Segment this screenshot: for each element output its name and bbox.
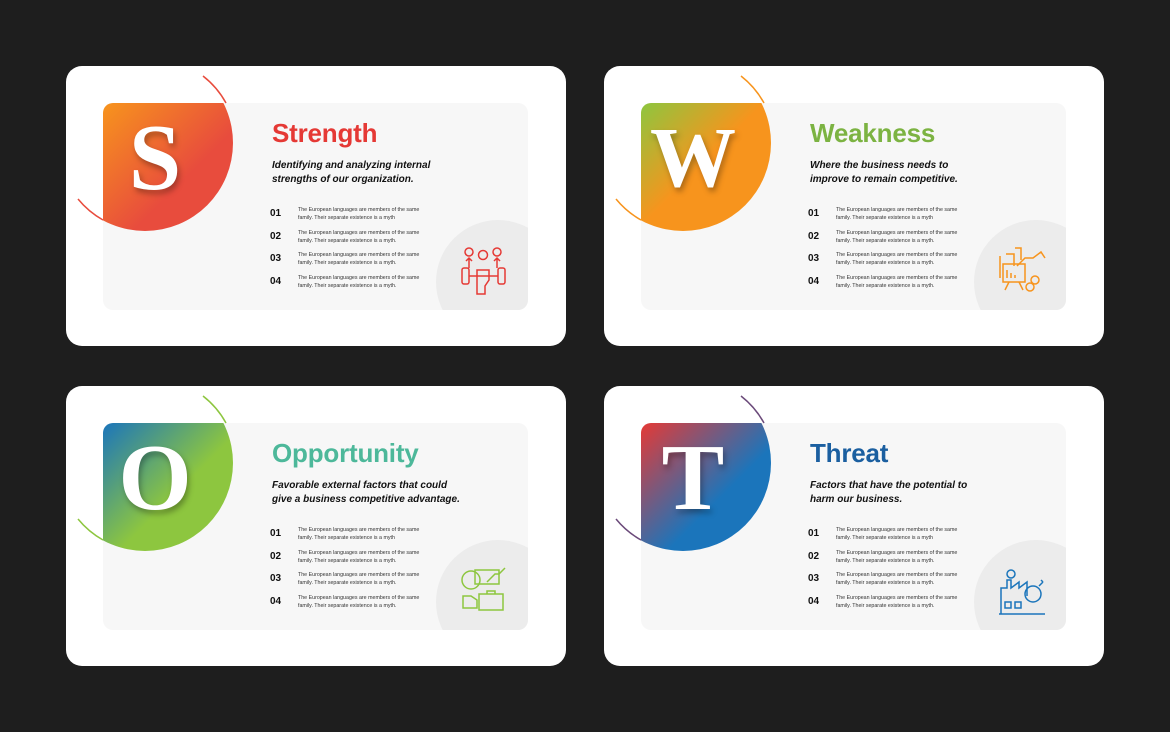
list: 01 bbox=[808, 208, 819, 219]
list: family. Their separate existence is a myth. bbox=[298, 558, 396, 564]
list: The European languages are members of the same bbox=[298, 550, 419, 556]
list: 01 bbox=[270, 528, 281, 539]
list bbox=[808, 527, 958, 609]
list: 02 bbox=[270, 231, 281, 242]
letter shape S: S bbox=[129, 106, 181, 210]
list: family. Their separate existence is a myth. bbox=[836, 558, 934, 564]
letter shape O bbox=[78, 395, 233, 551]
list: The European languages are members of the same bbox=[298, 595, 419, 601]
list bbox=[270, 207, 420, 289]
list: 01 bbox=[808, 528, 819, 539]
list: The European languages are members of the same bbox=[298, 275, 419, 281]
list: The European languages are members of the same bbox=[836, 527, 957, 533]
subtitle bbox=[810, 480, 967, 505]
list: family. Their separate existence is a myth. bbox=[836, 283, 934, 289]
subtitle: Favorable external factors that could bbox=[272, 480, 447, 491]
list: family. Their separate existence is a myth. bbox=[298, 603, 396, 609]
list: 02 bbox=[270, 551, 281, 562]
icon: factory bomb bbox=[999, 569, 1045, 615]
subtitle bbox=[272, 480, 460, 505]
list: 02 bbox=[808, 231, 819, 242]
list: family. Their separate existence is a myth. bbox=[298, 260, 396, 266]
list: family. Their separate existence is a myth bbox=[298, 535, 395, 541]
subtitle bbox=[272, 160, 431, 185]
list: 03 bbox=[808, 573, 819, 584]
list: The European languages are members of the same bbox=[836, 230, 957, 236]
list: 01 bbox=[270, 208, 281, 219]
list: The European languages are members of the same bbox=[836, 252, 957, 258]
subtitle: strengths of our organization. bbox=[272, 174, 414, 185]
list bbox=[270, 527, 420, 609]
list: family. Their separate existence is a myth bbox=[836, 215, 933, 221]
letter shape T: T bbox=[662, 426, 724, 530]
list: family. Their separate existence is a myth. bbox=[836, 603, 934, 609]
list: family. Their separate existence is a myth. bbox=[836, 580, 934, 586]
title: Opportunity bbox=[272, 438, 419, 468]
subtitle bbox=[810, 160, 958, 185]
list: The European languages are members of the same bbox=[836, 550, 957, 556]
subtitle: Where the business needs to bbox=[810, 160, 948, 171]
list: family. Their separate existence is a myth. bbox=[298, 580, 396, 586]
icon: chart board bbox=[999, 247, 1046, 292]
list: The European languages are members of the same bbox=[298, 252, 419, 258]
list bbox=[808, 207, 958, 289]
list: 04 bbox=[808, 596, 819, 607]
list: 04 bbox=[808, 276, 819, 287]
list: 04 bbox=[270, 276, 281, 287]
subtitle: harm our business. bbox=[810, 494, 902, 505]
list: family. Their separate existence is a myth. bbox=[298, 238, 396, 244]
subtitle: give a business competitive advantage. bbox=[272, 494, 460, 505]
subtitle: Factors that have the potential to bbox=[810, 480, 967, 491]
list: The European languages are members of the same bbox=[298, 230, 419, 236]
card: Weakness bbox=[604, 66, 1104, 346]
letter shape W bbox=[616, 75, 771, 231]
icon: money briefcase bbox=[461, 568, 506, 611]
letter shape T bbox=[616, 396, 771, 551]
list: 04 bbox=[270, 596, 281, 607]
subtitle: improve to remain competitive. bbox=[810, 174, 958, 185]
card: Strength bbox=[66, 66, 566, 346]
list: family. Their separate existence is a myth bbox=[298, 215, 395, 221]
list: The European languages are members of the same bbox=[298, 207, 419, 213]
subtitle: Identifying and analyzing internal bbox=[272, 160, 430, 171]
icon: dumbbell money bbox=[461, 247, 506, 295]
list: The European languages are members of the same bbox=[298, 527, 419, 533]
list: family. Their separate existence is a myth. bbox=[298, 283, 396, 289]
list: family. Their separate existence is a myth. bbox=[836, 238, 934, 244]
letter shape S bbox=[78, 75, 233, 231]
list: The European languages are members of the same bbox=[836, 275, 957, 281]
list: The European languages are members of the same bbox=[836, 595, 957, 601]
list: The European languages are members of the same bbox=[298, 572, 419, 578]
list: 03 bbox=[270, 573, 281, 584]
title: Strength bbox=[272, 118, 377, 148]
list: The European languages are members of the same bbox=[836, 207, 957, 213]
list: family. Their separate existence is a myth. bbox=[836, 260, 934, 266]
letter shape O: O bbox=[118, 426, 192, 530]
list: 03 bbox=[808, 253, 819, 264]
letter shape W: W bbox=[650, 109, 736, 205]
title: Threat bbox=[810, 438, 888, 468]
card: Threat bbox=[604, 386, 1104, 666]
list: family. Their separate existence is a myth bbox=[836, 535, 933, 541]
title: Weakness bbox=[810, 118, 935, 148]
card: Opportunity bbox=[66, 386, 566, 666]
list: The European languages are members of the same bbox=[836, 572, 957, 578]
list: 03 bbox=[270, 253, 281, 264]
list: 02 bbox=[808, 551, 819, 562]
